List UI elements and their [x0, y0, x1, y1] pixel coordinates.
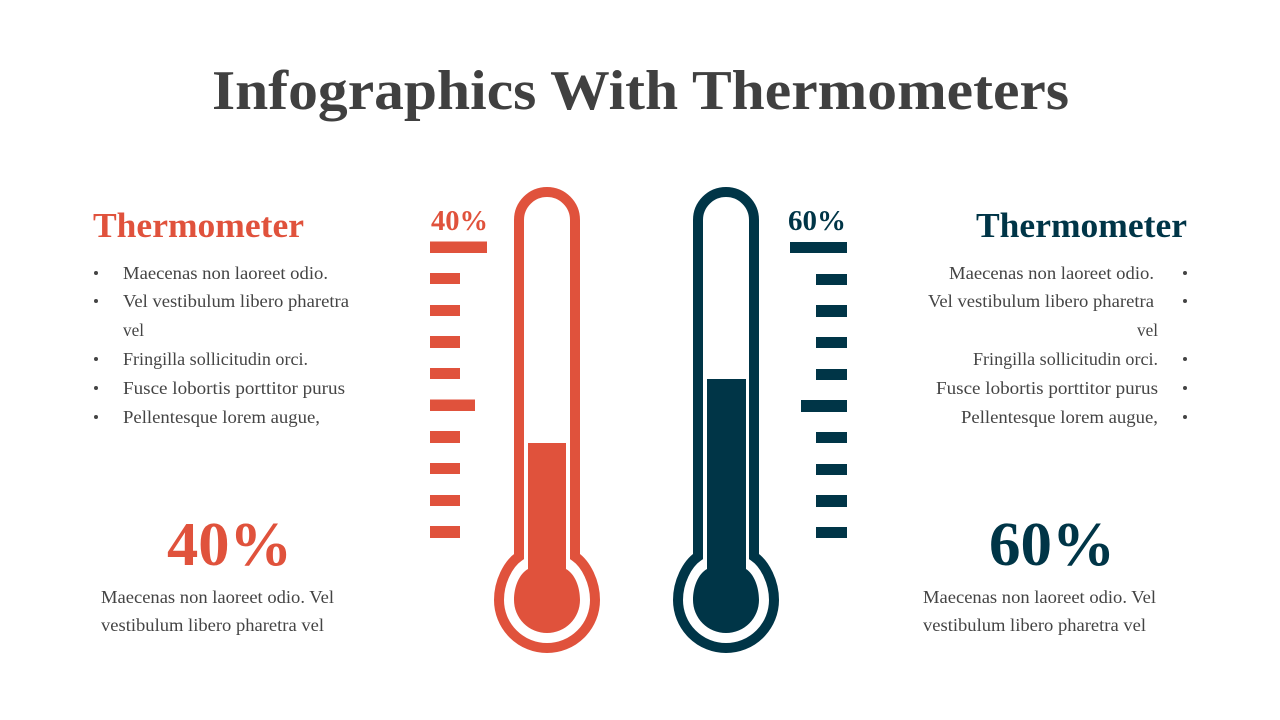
right description: [923, 587, 1156, 635]
right bullet list: Maecenas non laoreet odio.: [949, 263, 1154, 283]
left description: [101, 587, 334, 635]
blue scale: [788, 205, 847, 538]
left bullet list: Fusce lobortis porttitor purus: [123, 378, 345, 398]
left bullet list: vel: [123, 320, 144, 340]
right bullet list: [928, 263, 1187, 427]
left big percentage: 40%: [167, 511, 292, 579]
left description: vestibulum libero pharetra vel: [101, 615, 324, 635]
right bullet list: Fringilla sollicitudin orci.: [973, 349, 1158, 369]
title: Infographics With Thermometers: [212, 60, 1069, 122]
red tube and bulb outline: [499, 192, 595, 648]
blue thermometer: [678, 192, 774, 648]
blue scale label: 60%: [788, 205, 846, 237]
right big percentage: 60%: [989, 511, 1115, 579]
panel: left text: [93, 206, 349, 635]
left description: Maecenas non laoreet odio. Vel: [101, 587, 334, 607]
right bullet list: Vel vestibulum libero pharetra: [928, 291, 1154, 311]
red mercury: [514, 443, 580, 633]
right bullet list: vel: [1137, 320, 1158, 340]
right description: Maecenas non laoreet odio. Vel: [923, 587, 1156, 607]
panel: right text: [923, 206, 1187, 635]
red thermometer: [499, 192, 595, 648]
left bullet list: Pellentesque lorem augue,: [123, 407, 320, 427]
left bullet list: Maecenas non laoreet odio.: [123, 263, 328, 283]
left bullet list: [94, 263, 349, 427]
red scale label: 40%: [431, 205, 488, 237]
blue tube and bulb outline: [678, 192, 774, 648]
blue mercury: [693, 379, 759, 633]
right heading: Thermometer: [976, 206, 1187, 245]
left heading: Thermometer: [93, 206, 304, 245]
right bullet list: Fusce lobortis porttitor purus: [936, 378, 1158, 398]
left bullet list: Fringilla sollicitudin orci.: [123, 349, 308, 369]
left bullet list: Vel vestibulum libero pharetra: [123, 291, 349, 311]
right description: vestibulum libero pharetra vel: [923, 615, 1146, 635]
red scale: [430, 205, 488, 538]
right bullet list: Pellentesque lorem augue,: [961, 407, 1158, 427]
